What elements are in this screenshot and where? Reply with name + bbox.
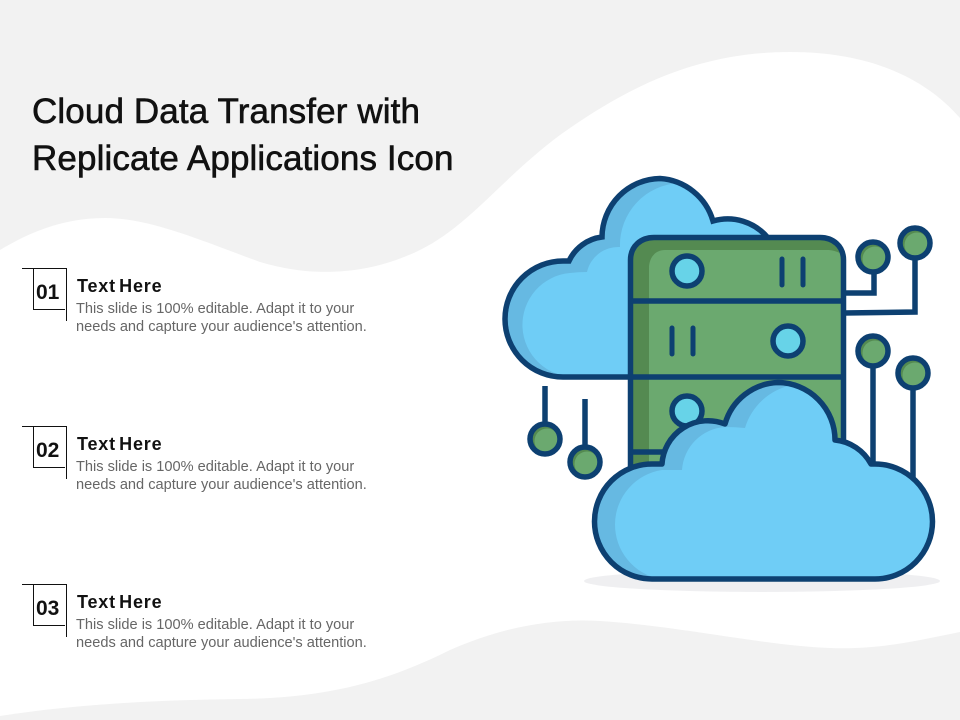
network nodes xyxy=(530,228,930,477)
body 02: This slide is 100% editable. Adapt it to your xyxy=(76,459,354,475)
body 01 xyxy=(76,301,367,335)
title: Cloud Data Transfer with xyxy=(32,92,420,131)
number box 03 xyxy=(22,584,67,637)
front cloud xyxy=(594,382,933,579)
item 01 xyxy=(22,268,367,335)
body 03 xyxy=(76,617,367,651)
back cloud xyxy=(505,178,768,377)
ground shadow xyxy=(584,570,940,592)
body 01: needs and capture your audience's attention. xyxy=(76,319,367,335)
body 02: needs and capture your audience's attention. xyxy=(76,477,367,493)
number box 02 xyxy=(22,426,67,479)
body 03: needs and capture your audience's attention. xyxy=(76,635,367,651)
body 03: This slide is 100% editable. Adapt it to your xyxy=(76,617,354,633)
body 02 xyxy=(76,459,367,493)
wires to right nodes xyxy=(844,243,915,480)
body 01: This slide is 100% editable. Adapt it to your xyxy=(76,301,354,317)
heading 02: Text Here xyxy=(77,434,162,454)
number box 01 xyxy=(22,268,67,321)
heading 03: Text Here xyxy=(77,592,162,612)
wires to left nodes xyxy=(545,386,585,462)
heading 01: Text Here xyxy=(77,276,162,296)
item 03 xyxy=(22,584,367,651)
item 02 xyxy=(22,426,367,493)
title xyxy=(32,92,454,178)
server rack xyxy=(630,238,844,480)
number 01: 01 xyxy=(36,281,59,304)
title: Replicate Applications Icon xyxy=(32,138,454,178)
number 02: 02 xyxy=(36,439,59,462)
number 03: 03 xyxy=(36,597,59,620)
